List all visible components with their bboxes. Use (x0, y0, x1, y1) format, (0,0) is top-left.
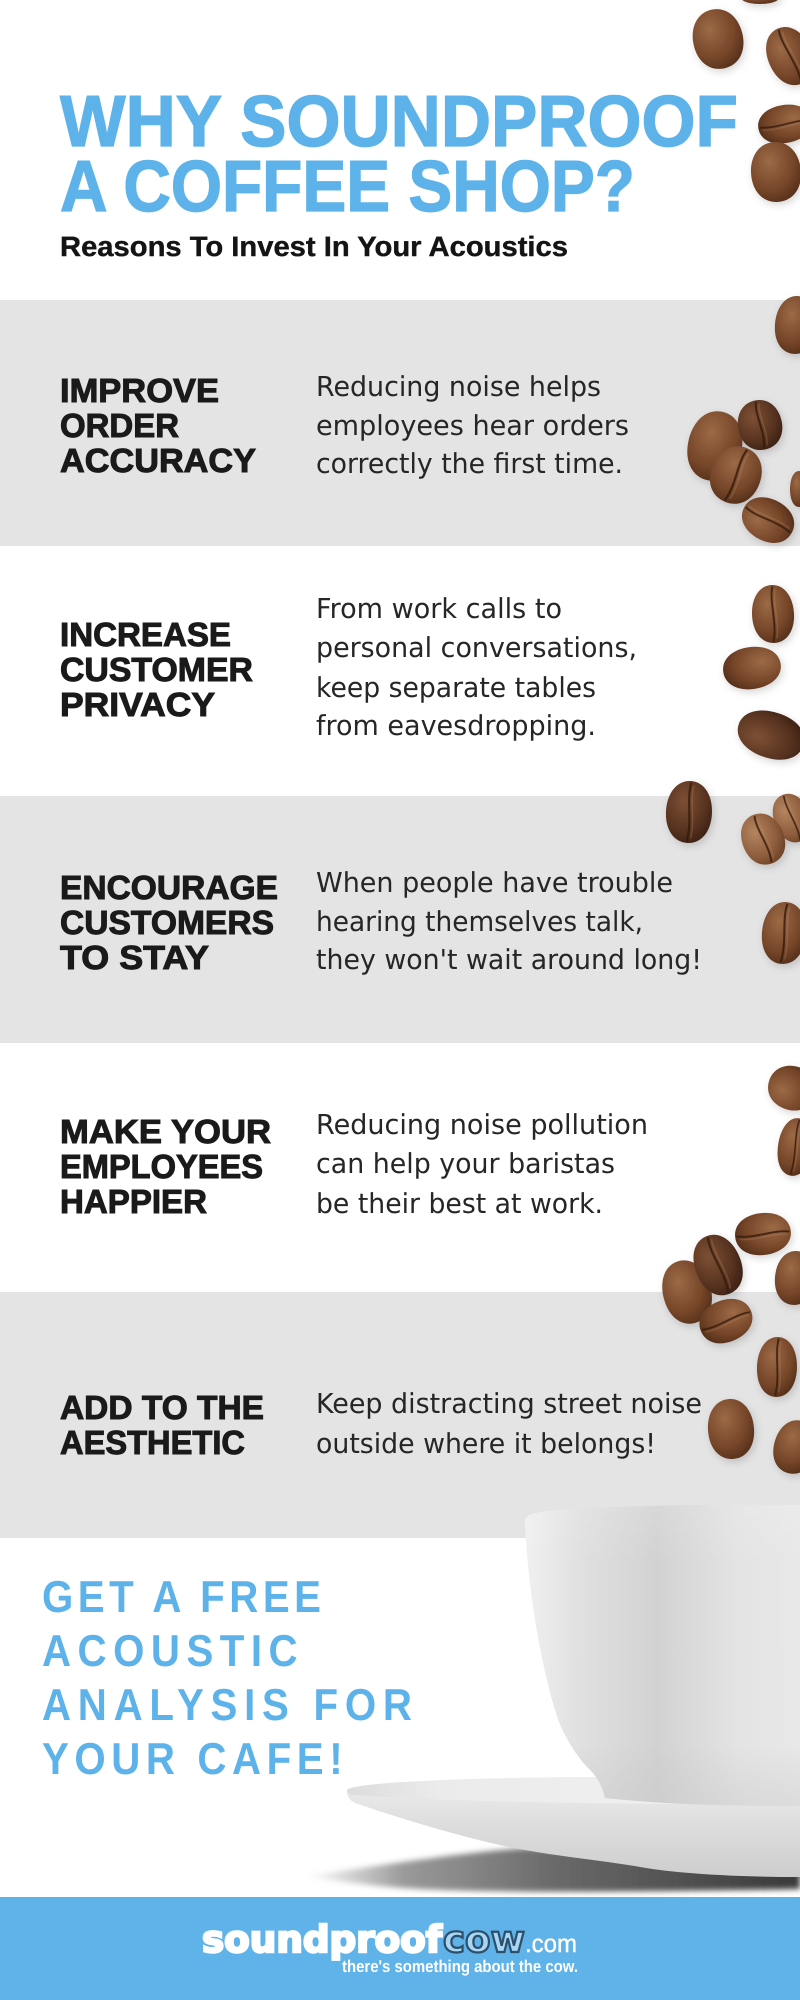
text: increase customer privacy: From work calls to (316, 593, 562, 625)
title (60, 81, 738, 227)
text: improve order accuracy (316, 371, 629, 480)
text: increase customer privacy: from eavesdropping. (316, 710, 596, 742)
call to action: ACOUSTIC (42, 1627, 298, 1676)
logo (202, 1918, 578, 1976)
heading: encourage customers to stay (60, 870, 278, 977)
logo: .com (525, 1930, 577, 1958)
text: add to the aesthetic (316, 1388, 702, 1460)
subtitle: Reasons To Invest In Your Acoustics (60, 231, 568, 262)
heading: make your employees happier (60, 1114, 271, 1221)
text: increase customer privacy: personal conversations, (316, 632, 637, 664)
logo: soundproof (202, 1918, 443, 1961)
heading: increase customer privacy: INCREASE (60, 617, 231, 654)
title: A COFFEE SHOP? (60, 146, 635, 227)
heading: encourage customers to stay: ENCOURAGE (60, 870, 278, 907)
heading: increase customer privacy: PRIVACY (60, 687, 215, 724)
title: WHY SOUNDPROOF (60, 81, 738, 162)
panel: increase customer privacy (0, 546, 800, 796)
text: encourage customers to stay: hearing themselves talk, (316, 906, 643, 938)
icon: coffee beans falling along right edge (656, 0, 800, 1479)
heading: make your employees happier: MAKE YOUR (60, 1114, 271, 1151)
heading: encourage customers to stay: TO STAY (60, 940, 209, 977)
text: make your employees happier (316, 1109, 648, 1220)
panel: make your employees happier (0, 1043, 800, 1292)
call to action (42, 1573, 412, 1784)
text: improve order accuracy: employees hear orders (316, 410, 629, 442)
panel: improve order accuracy (0, 300, 800, 546)
text: encourage customers to stay: When people have trouble (316, 867, 673, 899)
text: make your employees happier: be their best at work. (316, 1188, 603, 1220)
call to action: GET A FREE (42, 1573, 321, 1622)
call to action: ANALYSIS FOR (42, 1681, 412, 1730)
heading: improve order accuracy: IMPROVE (60, 373, 219, 410)
heading: add to the aesthetic: AESTHETIC (60, 1425, 245, 1462)
call to action: YOUR CAFE! (42, 1735, 343, 1784)
panel: add to the aesthetic (0, 1292, 800, 1538)
heading: encourage customers to stay: CUSTOMERS (60, 905, 274, 942)
heading: improve order accuracy (60, 373, 256, 480)
heading: make your employees happier: EMPLOYEES (60, 1149, 263, 1186)
text: make your employees happier: Reducing noise pollution (316, 1109, 648, 1141)
logo: there's something about the cow. (342, 1957, 578, 1976)
text: increase customer privacy (316, 593, 637, 742)
heading: add to the aesthetic: ADD TO THE (60, 1390, 264, 1427)
heading: improve order accuracy: ACCURACY (60, 443, 256, 480)
text: encourage customers to stay (316, 867, 702, 976)
footer band (0, 1897, 800, 2000)
text: add to the aesthetic: Keep distracting street noise (316, 1388, 702, 1420)
heading: improve order accuracy: ORDER (60, 408, 179, 445)
heading: increase customer privacy (60, 617, 253, 724)
text: increase customer privacy: keep separate tables (316, 672, 596, 704)
heading: add to the aesthetic (60, 1390, 264, 1462)
heading: make your employees happier: HAPPIER (60, 1184, 207, 1221)
image: white coffee cup on saucer (280, 1505, 800, 1917)
text: improve order accuracy: Reducing noise helps (316, 371, 601, 403)
text: add to the aesthetic: outside where it belongs! (316, 1428, 656, 1460)
panel: encourage customers to stay (0, 796, 800, 1043)
text: make your employees happier: can help your baristas (316, 1148, 615, 1180)
heading: increase customer privacy: CUSTOMER (60, 652, 253, 689)
text: improve order accuracy: correctly the first time. (316, 448, 623, 480)
logo: cow (443, 1918, 525, 1961)
text: encourage customers to stay: they won't wait around long! (316, 944, 702, 976)
